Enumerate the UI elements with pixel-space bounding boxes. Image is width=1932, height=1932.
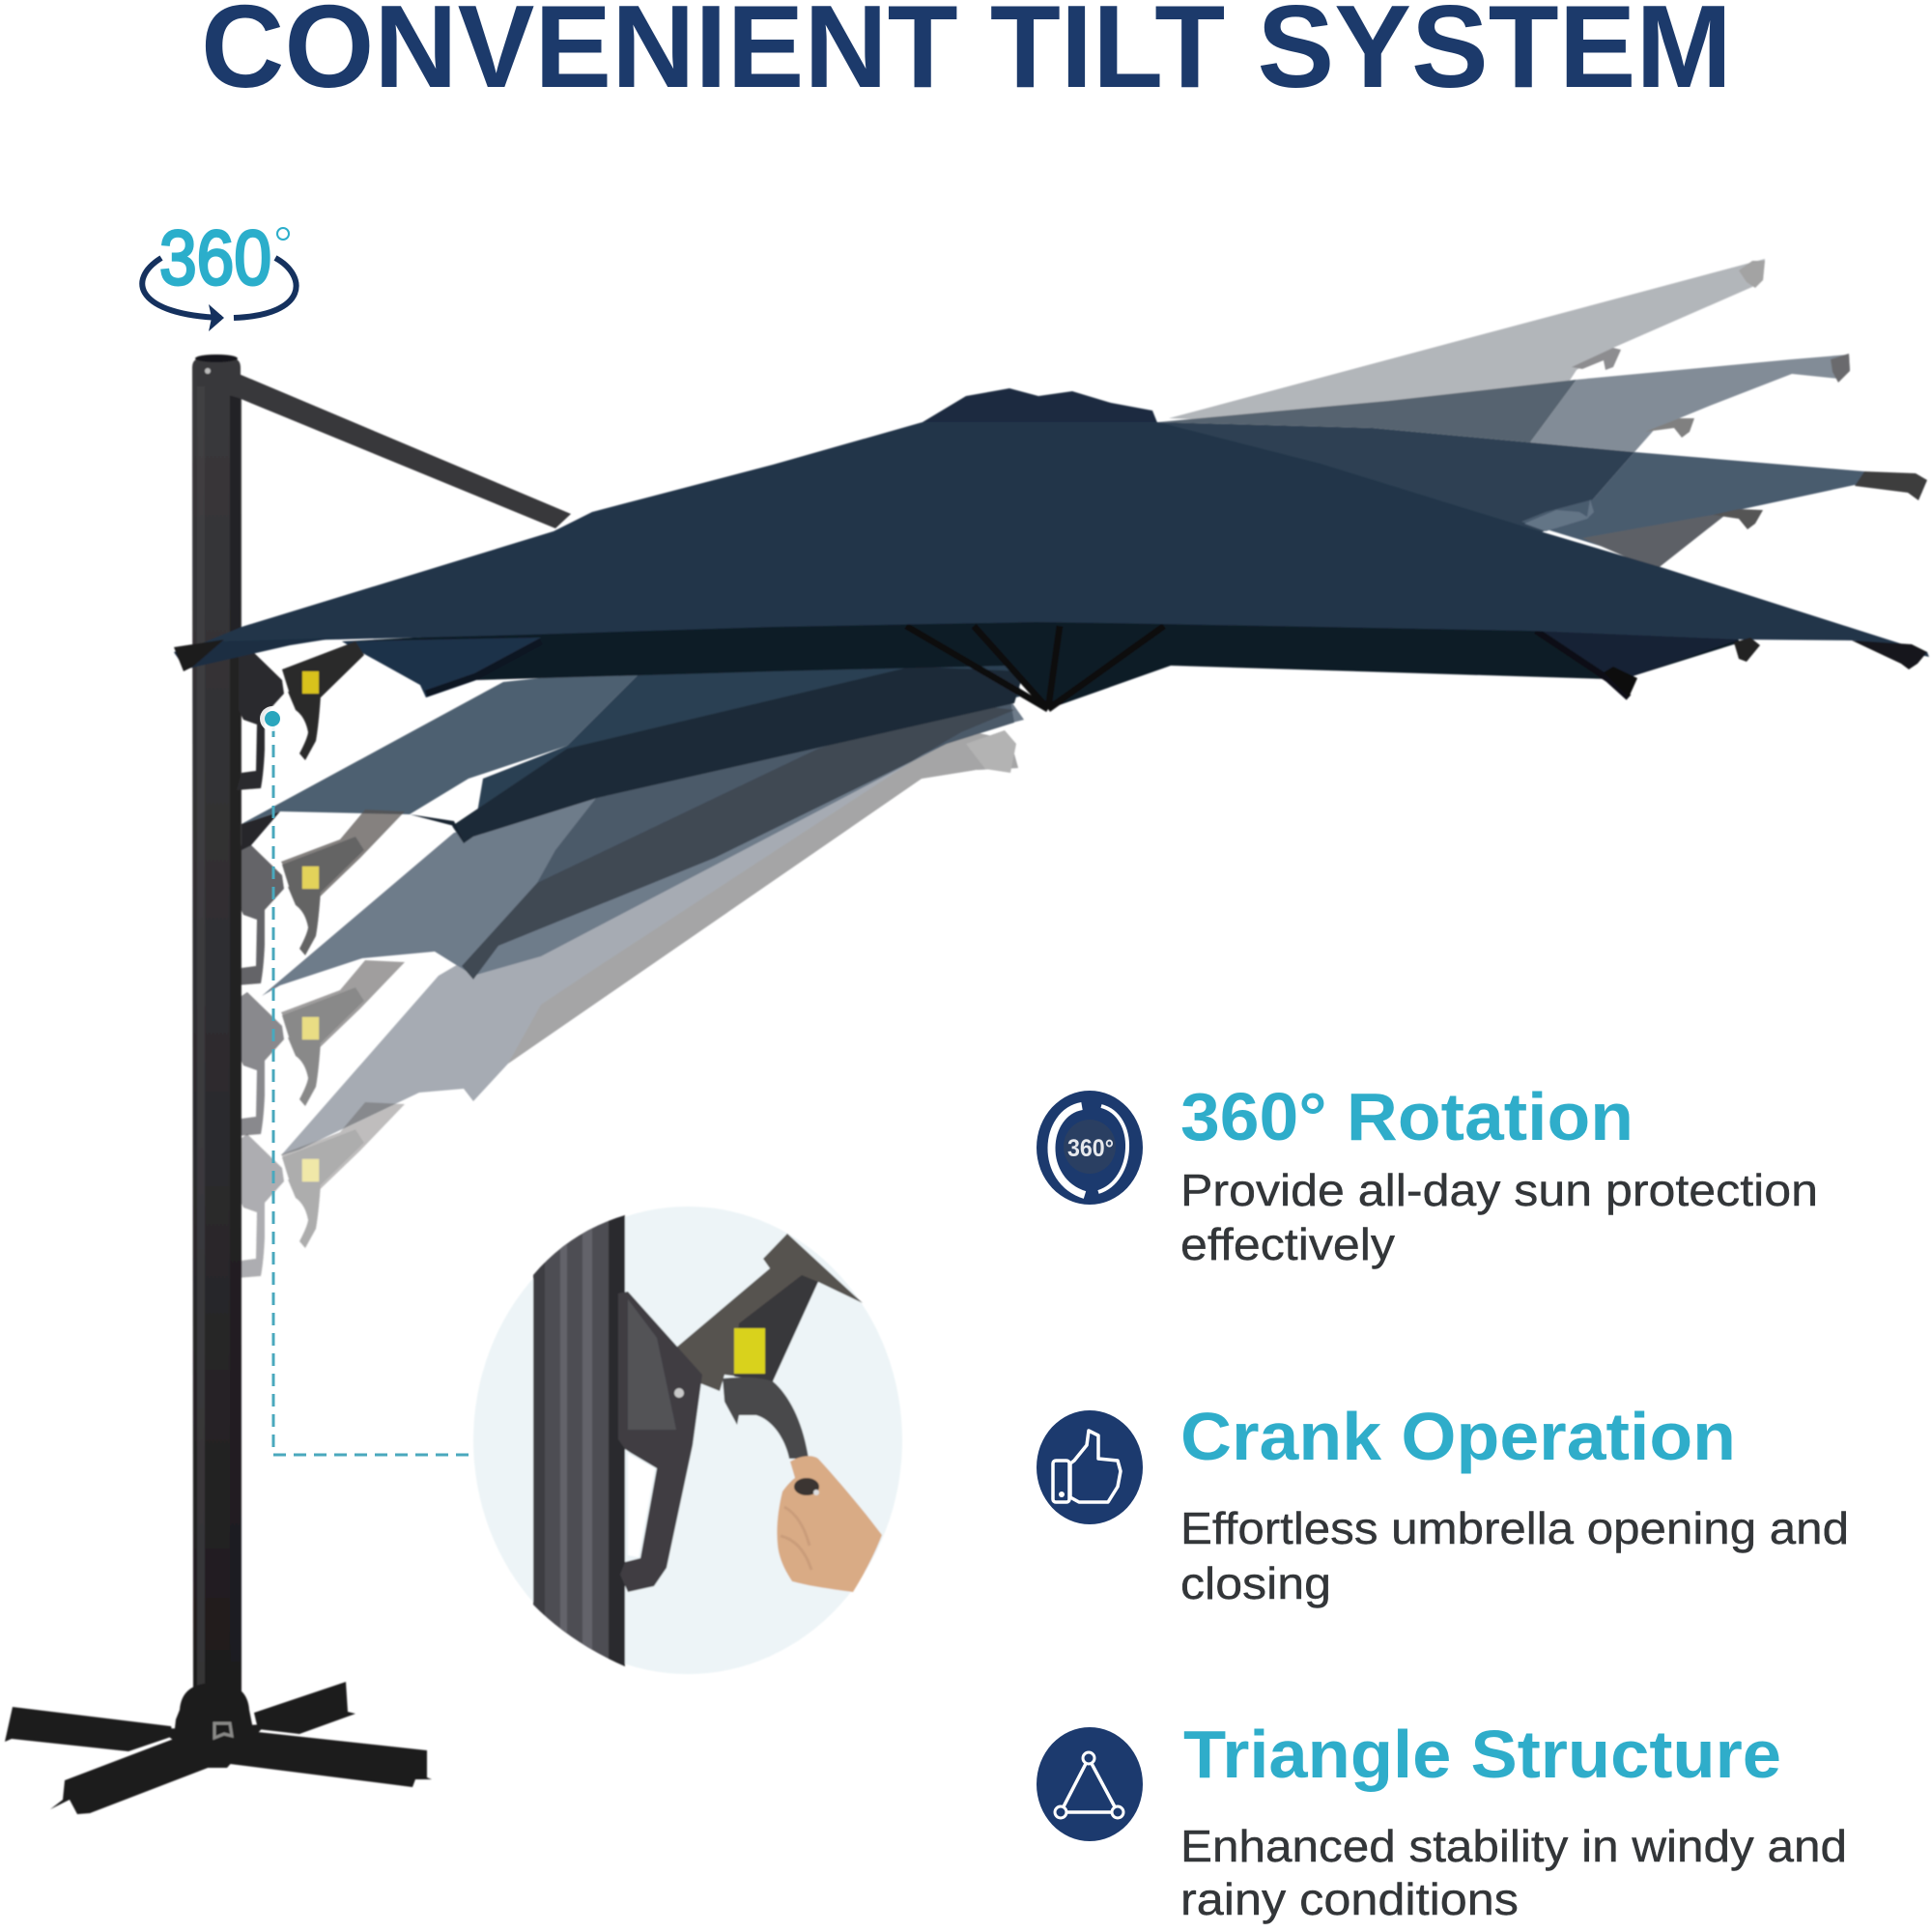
panel: feature crank operation [1037, 1399, 1849, 1608]
inset hand [777, 1456, 882, 1592]
description [1180, 1503, 1849, 1608]
inset background circle [473, 1207, 902, 1674]
base hub junction [159, 1724, 266, 1768]
inset bracket [618, 1292, 702, 1592]
base hub [174, 1683, 253, 1767]
heading: 360° Rotation [1180, 1079, 1634, 1154]
upper-low tilt position ghost canopy [242, 662, 1024, 843]
callout: pointer dashed line from crank to inset [260, 706, 469, 1455]
heading: Crank Operation [1180, 1399, 1736, 1474]
base leg front right [222, 1732, 432, 1787]
main canopy crown [923, 388, 1158, 425]
panel: feature triangle structure [1037, 1717, 1847, 1924]
description: Effortless umbrella opening and [1180, 1503, 1849, 1553]
ribs at hub [906, 626, 1164, 709]
icon: triangle [1037, 1727, 1143, 1841]
description: rainy conditions [1180, 1874, 1519, 1924]
ghost crank mechanisms [237, 810, 405, 1278]
inset label [734, 1328, 765, 1374]
panel: crank close-up inset [473, 1207, 902, 1674]
icon: 360 rotation: 360° [1067, 1135, 1114, 1162]
raised tilt positions, right side [1158, 259, 1927, 570]
base [5, 1682, 432, 1814]
inset bracket slot [628, 1454, 655, 1557]
heading: Triangle Structure [1183, 1717, 1781, 1792]
inset pole section [533, 1208, 626, 1671]
raised ghost canopy 3 [1158, 422, 1634, 536]
icon: thumbs up [1037, 1410, 1143, 1524]
main underside of canopy [342, 618, 1749, 709]
description [1180, 1165, 1818, 1269]
description: closing [1180, 1558, 1331, 1608]
description: effectively [1180, 1219, 1395, 1269]
base leg front left [50, 1739, 215, 1814]
lowest tilt position ghost canopy [281, 729, 1018, 1155]
description: Provide all-day sun protection [1180, 1165, 1818, 1215]
base leg back left [5, 1707, 174, 1751]
canopy tip hardware [1852, 640, 1927, 669]
icon: 360 rotation [1037, 1091, 1143, 1205]
inset arm [676, 1234, 863, 1391]
raised ghost canopy 1 [1169, 259, 1765, 441]
base leg back right [254, 1682, 355, 1734]
icon: 360 rotation over pole [142, 214, 297, 331]
raised ghost canopy 2 [1158, 380, 1577, 442]
panel: feature 360 rotation [1037, 1079, 1818, 1269]
base lock [214, 1723, 232, 1738]
support arm [214, 370, 571, 528]
description: Enhanced stability in windy and [1180, 1821, 1847, 1871]
main canopy [174, 422, 1929, 697]
inset crank handle [723, 1378, 809, 1459]
pole [192, 355, 242, 1700]
icon: 360 rotation over pole: 360 [159, 214, 271, 300]
crank mechanism [237, 641, 364, 790]
description [1180, 1821, 1847, 1924]
middle tilt position ghost canopy [262, 700, 1024, 996]
